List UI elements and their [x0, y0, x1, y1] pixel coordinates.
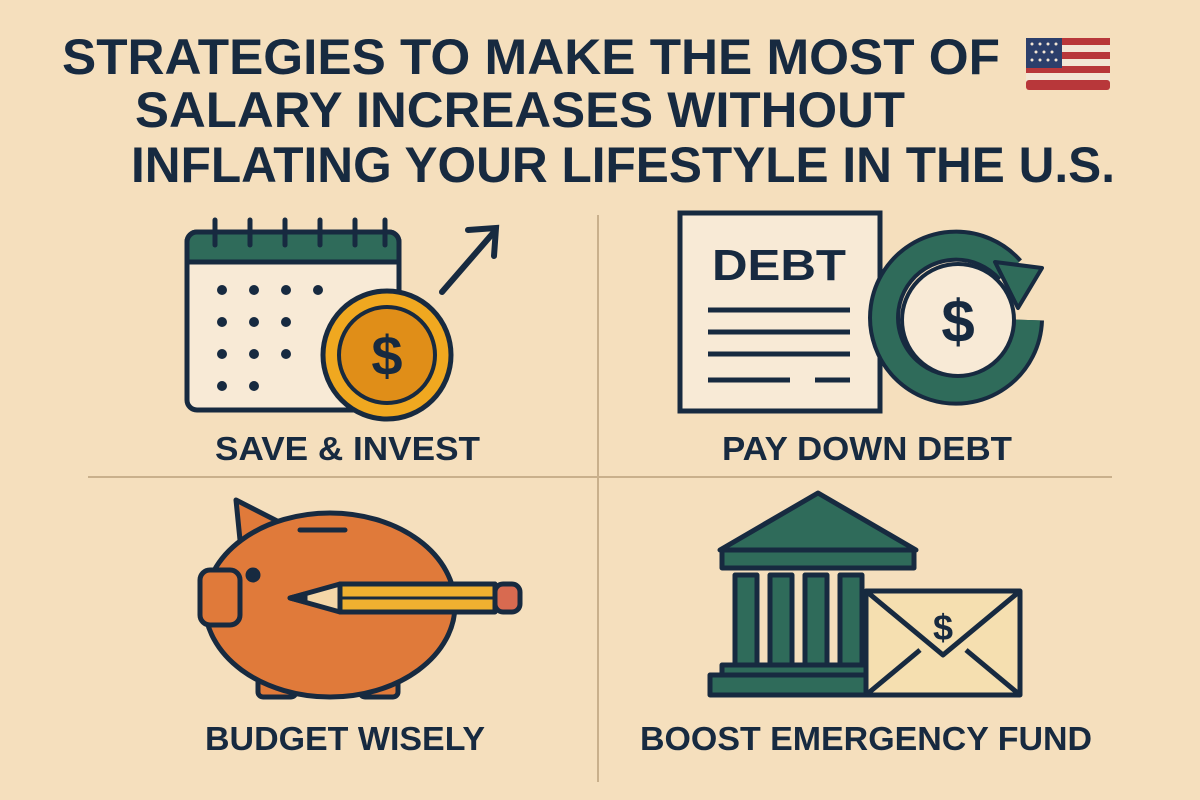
- icon: coin: $: [371, 324, 403, 387]
- icon: circular arrow with dollar: $: [941, 288, 975, 355]
- panel: boost emergency fund: [640, 493, 1092, 757]
- icon: circular arrow with dollar: [884, 246, 1042, 390]
- label: PAY DOWN DEBT: [722, 430, 1012, 467]
- panel: pay down debt: [680, 213, 1042, 467]
- label: BOOST EMERGENCY FUND: [640, 720, 1092, 757]
- label: SAVE & INVEST: [215, 430, 480, 467]
- title: [62, 29, 1115, 193]
- icon: bank: [710, 493, 926, 695]
- icon: pencil: [290, 584, 520, 612]
- icon: debt document: DEBT: [712, 241, 846, 290]
- icon: envelope: [866, 591, 1020, 695]
- icon: calendar: [187, 220, 399, 410]
- panel: budget wisely: [200, 500, 520, 757]
- title: SALARY INCREASES WITHOUT: [135, 82, 905, 138]
- icon: US flag: [1026, 38, 1110, 90]
- icon: coin: [323, 291, 451, 419]
- icon: piggy bank: [200, 500, 455, 697]
- icon: debt document: [680, 213, 880, 411]
- arrow: up: [442, 228, 496, 292]
- title: INFLATING YOUR LIFESTYLE IN THE U.S.: [131, 137, 1115, 193]
- panel: save & invest: [187, 220, 496, 467]
- icon: envelope: $: [933, 607, 953, 648]
- title: STRATEGIES TO MAKE THE MOST OF: [62, 29, 1000, 85]
- label: BUDGET WISELY: [205, 720, 485, 757]
